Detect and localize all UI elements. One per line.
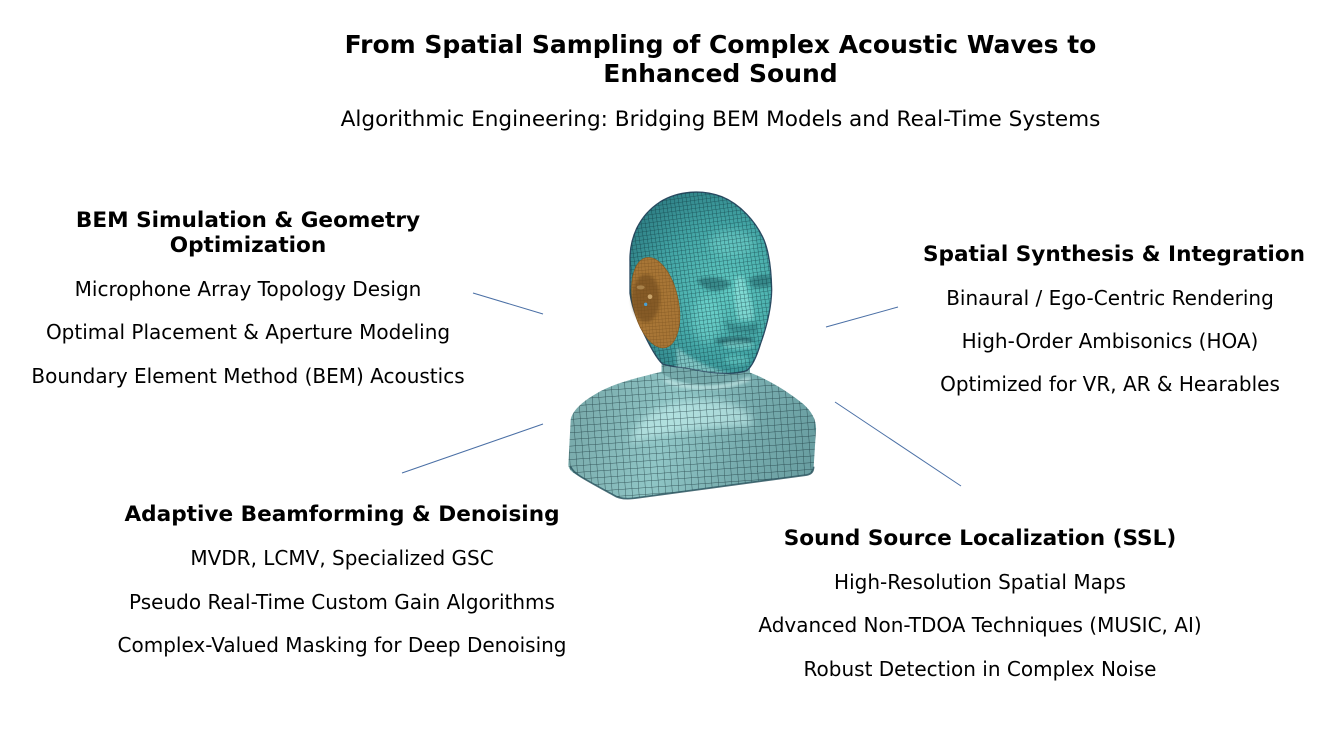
panel: spatial synthesis [923,242,1305,396]
item: spatial maps: High-Resolution Spatial Maps [834,570,1126,594]
heading: BEM simulation: Optimization [170,233,326,258]
subtitle: Algorithmic Engineering: Bridging BEM Models and Real-Time Systems [341,107,1100,132]
item: VR AR: Optimized for VR, AR & Hearables [940,372,1280,396]
heading: BEM simulation [76,208,420,258]
panel: sound source localization [758,526,1202,681]
item: placement: Optimal Placement & Aperture Modeling [46,320,450,344]
heading: adaptive beamforming: Adaptive Beamforming & Denoising [124,502,560,527]
heading: SSL: Sound Source Localization (SSL) [784,526,1176,551]
item: binaural: Binaural / Ego-Centric Rendering [946,286,1274,310]
item: topology: Microphone Array Topology Design [75,277,421,301]
torso and neck [568,360,816,499]
title: Enhanced Sound [603,59,838,88]
item: BEM acoustics: Boundary Element Method (BEM) Acoustics [31,364,465,388]
heading: BEM simulation: BEM Simulation & Geometry [76,208,420,233]
head [624,187,777,377]
item: non-TDOA: Advanced Non-TDOA Techniques (MUSIC, AI) [758,613,1202,637]
item: MVDR: MVDR, LCMV, Specialized GSC [190,546,494,570]
item: robust detection: Robust Detection in Complex Noise [804,657,1156,681]
title [345,30,1096,88]
panel: adaptive beamforming [118,502,566,657]
title: From Spatial Sampling of Complex Acoustic Waves to [345,30,1096,59]
panel: BEM simulation [31,208,465,388]
item: masking: Complex-Valued Masking for Deep Denoising [118,633,566,657]
item: ambisonics: High-Order Ambisonics (HOA) [962,329,1258,353]
icon: meshed head and torso model [568,191,816,500]
heading: spatial synthesis: Spatial Synthesis & Integration [923,242,1305,267]
ear disc [624,253,687,352]
item: gain algorithms: Pseudo Real-Time Custom Gain Algorithms [129,590,555,614]
